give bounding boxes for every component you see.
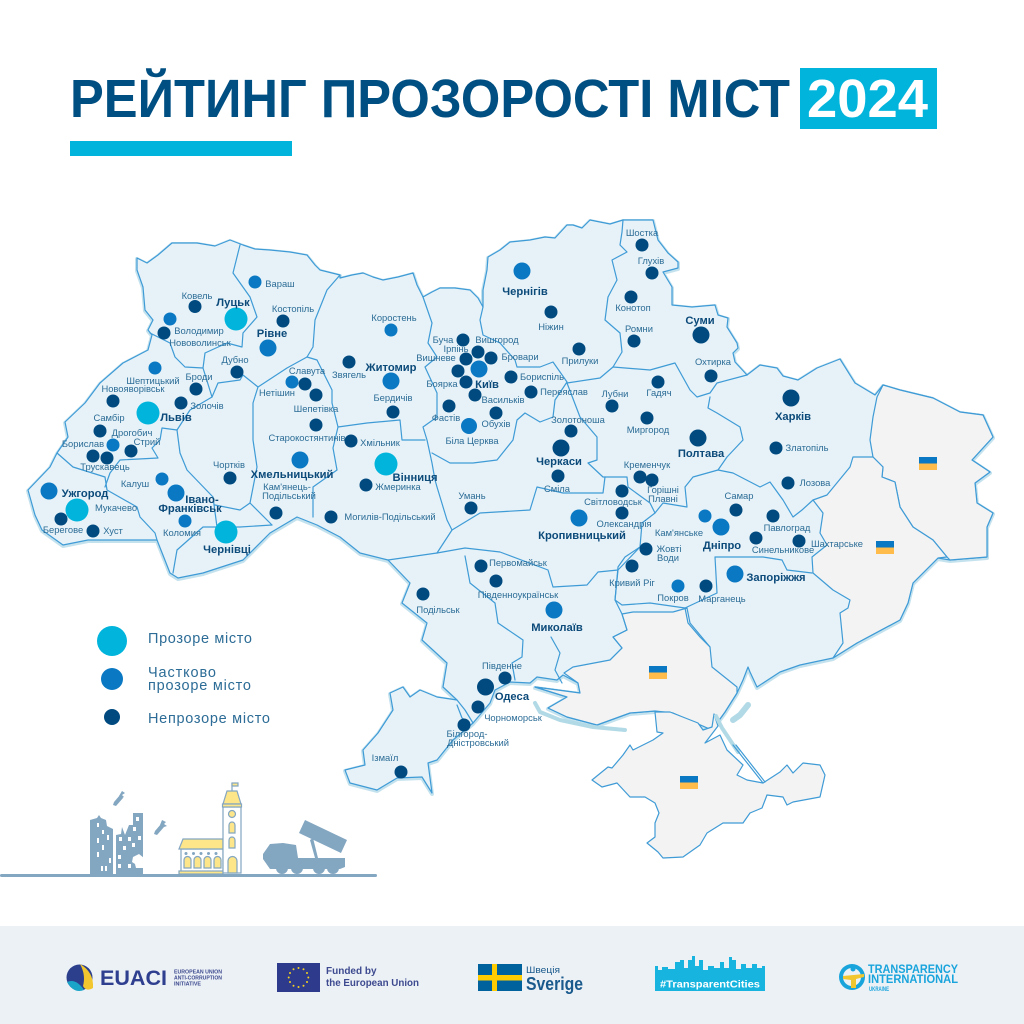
logo: Funded by the European Union: the European Union [326, 978, 419, 989]
city: Pivdenne [482, 660, 522, 684]
logo: EUACI: EUACI [100, 967, 167, 990]
mainland fill [28, 220, 993, 793]
legend: transparent city: Прозоре місто [148, 631, 252, 647]
city: Marhanets: Марганець [698, 593, 746, 604]
logo: Sweden: Швеція [526, 965, 560, 975]
legend [97, 626, 270, 727]
city: Bila Tserkva: Біла Церква [445, 435, 499, 446]
city: Samar [725, 490, 753, 516]
city: Shostka [626, 227, 659, 252]
city: Podilsk [416, 588, 461, 615]
city: Synelnykove: Синельникове [752, 544, 814, 555]
city: Kamianets-Podilskyi: Подільський [262, 490, 316, 501]
city: Zhovti Vody [640, 542, 681, 563]
city: Novovolynsk [158, 326, 232, 348]
city: Kropyvnytskyi [538, 510, 626, 542]
city: Pryluky: Прилуки [562, 355, 598, 366]
city: Lutsk [216, 297, 250, 330]
occupied region: Donetsk [812, 457, 947, 658]
city: Nizhyn [538, 306, 564, 332]
ruined buildings [90, 813, 144, 874]
city: Mykolaiv: Миколаїв [531, 622, 583, 634]
city: Sumy: Суми [685, 315, 715, 327]
city: Bilhorod-Dnistrovskyi [447, 718, 509, 748]
town hall [179, 783, 242, 874]
city: Lutsk: Луцьк [216, 297, 250, 309]
city: Vasylkiv [468, 388, 524, 405]
city: Irpin [443, 343, 472, 366]
city: Berdychiv: Бердичів [373, 392, 413, 403]
city: Zlatopil: Златопіль [785, 442, 829, 453]
logo: TransparentCities: #TransparentCities [660, 980, 760, 990]
city: Shepetivka: Шепетівка [294, 403, 339, 414]
city: Okhtyrka [695, 356, 732, 382]
city: Novoiavorivsk [101, 383, 165, 408]
city: Oleksandriia: Олександрія [596, 518, 652, 529]
city: Pereiaslav [524, 386, 588, 398]
city: Novoiavorivsk: Новояворівськ [101, 383, 165, 394]
city: Svitlovodsk [584, 484, 643, 507]
city: Shakhtarske: Шахтарське [811, 538, 863, 549]
city: Irpin: Ірпінь [443, 343, 469, 354]
city: Chernivtsi [203, 520, 251, 556]
legend: partially transparent city [101, 665, 251, 694]
city: Bucha: Буча [433, 334, 454, 345]
city: Stryi [124, 436, 160, 458]
logo: EUACI: INITIATIVE [174, 982, 202, 988]
city: Lviv: Львів [160, 412, 192, 424]
occupied region: Kherson [535, 608, 737, 730]
logo: Transparency International Ukraine: INTERNATIONAL [868, 974, 958, 986]
legend: partially transparent city: Частково [148, 665, 216, 681]
logo: Transparency International Ukraine: UKRAINE [869, 987, 889, 993]
city: Boiarka [426, 376, 472, 389]
city: Sheptytskyi: Шептицький [126, 375, 180, 386]
city: Obukhiv [482, 406, 510, 429]
city: Dnipro: Дніпро [703, 540, 741, 552]
city: Kalush: Калуш [121, 478, 149, 489]
logo: Funded by the European Union: Funded by [326, 966, 377, 977]
logo: Transparency International Ukraine [839, 964, 958, 993]
city: Berdychiv [373, 392, 413, 418]
illustration: war and city [0, 783, 377, 877]
title: РЕЙТИНГ ПРОЗОРОСТІ МІСТ [70, 68, 790, 129]
bomb 1 [113, 791, 125, 806]
legend: non-transparent city: Непрозоре місто [148, 711, 270, 727]
city: Zaporizhzhia: Запоріжжя [746, 572, 806, 584]
city: Pavlohrad: Павлоград [764, 522, 811, 533]
city: Bilhorod-Dnistrovskyi: Дністровський [447, 737, 509, 748]
city: Zhovti Vody: Води [657, 552, 679, 563]
city: Pokrov: Покров [657, 592, 689, 603]
city: Kovel: Ковель [182, 290, 213, 301]
city: Vinnytsia: Вінниця [392, 472, 438, 484]
city: Khmilnyk: Хмільник [360, 437, 401, 448]
city: Ivano-Frankivsk: Франківськ [158, 503, 222, 515]
city: Uman [458, 490, 486, 514]
city: Horishni Plavni [646, 474, 679, 504]
city: Vasylkiv: Васильків [482, 394, 524, 405]
occupied region: Crimea [592, 712, 825, 858]
city: Kyiv [470, 360, 499, 391]
city: Lubny [602, 388, 628, 412]
city: Kyiv: Київ [475, 379, 499, 391]
city: Kamianske [655, 510, 712, 538]
logo: EUACI: ANTI-CORRUPTION [174, 976, 222, 982]
city: Chernivtsi: Чернівці [203, 544, 251, 556]
city: Uzhhorod [40, 482, 108, 500]
city: Kryvyi Rih: Кривий Ріг [609, 577, 655, 588]
city: Boiarka: Боярка [426, 378, 458, 389]
city: Poltava: Полтава [678, 448, 725, 460]
city: Slavuta: Славута [289, 365, 326, 376]
bomb 2 [154, 820, 167, 835]
city: Zviahel [332, 356, 366, 380]
logo: Sweden: Sverige [526, 974, 583, 994]
city: Izmail: Ізмаїл [372, 752, 398, 763]
city: Khust: Хуст [103, 525, 124, 536]
city: Oleksandriia [596, 506, 652, 529]
city: Lubny: Лубни [602, 388, 628, 399]
city: Bila Tserkva [445, 418, 499, 446]
city: Boryspil [504, 370, 564, 384]
city: Romny [625, 323, 653, 348]
city: Smila [544, 470, 571, 494]
city: Brovary [484, 351, 539, 364]
map of Ukraine [28, 220, 993, 858]
city: Zhmerynka [360, 478, 422, 492]
city: Hlukhiv [638, 255, 664, 280]
city: Slavuta [289, 365, 326, 390]
city: Kremenchuk: Кременчук [624, 459, 671, 470]
logo: Funded by the European Union [277, 963, 419, 992]
legend: transparent city [97, 626, 252, 656]
city: Khust [86, 524, 124, 538]
city: Bilhorod-Dnistrovskyi: Білгород- [447, 728, 487, 739]
city: Lviv [136, 402, 192, 424]
city: Chornomorsk: Чорноморськ [484, 712, 543, 723]
city: Zhmerynka: Жмеринка [375, 481, 422, 492]
city: Zolochiv [174, 396, 224, 411]
city: Pivdennoukrainsk: Південноукраїнськ [478, 589, 559, 600]
city: Samar: Самар [725, 490, 753, 501]
transparent cities [66, 297, 438, 556]
city: Kropyvnytskyi: Кропивницький [538, 530, 626, 542]
spits and lagoons [535, 703, 748, 752]
city: Kostopil: Костопіль [272, 303, 314, 314]
city: Varash [248, 276, 295, 289]
city: Stryi: Стрий [134, 436, 160, 447]
city: Truskavets [80, 452, 130, 472]
city: Ivano-Frankivsk [158, 484, 222, 515]
city: Horishni Plavni: Горішні [647, 484, 679, 495]
city: Rivne: Рівне [257, 328, 287, 340]
city: Fastiv: Фастів [432, 412, 460, 423]
flag: Crimea [680, 776, 698, 789]
city: Khmilnyk [344, 434, 401, 448]
city: Kamianske: Кам'янське [655, 527, 703, 538]
year badge: 2024 [807, 69, 928, 129]
city: Pryluky [562, 342, 598, 366]
logo: EUACI [66, 964, 222, 991]
city: Truskavets: Трускавець [80, 461, 130, 472]
legend: partially transparent city: прозоре місто [148, 678, 251, 694]
city: Chornomorsk [472, 700, 543, 723]
title underline bar [70, 141, 292, 156]
city: Zaporizhzhia [726, 566, 806, 584]
city: Kolomyia [163, 514, 201, 538]
city: Obukhiv: Обухів [482, 418, 510, 429]
city: Lozova [782, 476, 831, 490]
rocket launcher truck [263, 820, 347, 874]
city: Uman: Умань [458, 490, 486, 501]
city: Korosten [371, 312, 417, 336]
logo: Sweden [478, 964, 583, 994]
city: Zolotonosha: Золотоноша [551, 414, 606, 425]
city: Shepetivka [294, 388, 339, 414]
city: Chortkiv [213, 459, 245, 484]
city: Ivano-Frankivsk: Івано- [185, 494, 219, 506]
Arabat spit line [733, 745, 765, 783]
city: Vyshneve [416, 352, 464, 378]
legend: non-transparent city [104, 709, 270, 727]
city: Cherkasy [536, 440, 582, 468]
city: Pokrov [657, 580, 689, 603]
city: Volodymyr [164, 312, 224, 336]
city: Zlatopil [770, 442, 829, 454]
city: Drohobych [106, 427, 152, 452]
city: Brovary: Бровари [501, 351, 539, 362]
logo: Transparency International Ukraine: TRANSPARENCY [868, 964, 958, 976]
flag: Kherson [649, 666, 667, 679]
city: Dnipro [703, 518, 741, 552]
city: Konotop [615, 290, 651, 313]
city: Kolomyia: Коломия [163, 527, 201, 538]
city: Sambir: Самбір [93, 412, 125, 423]
city: Kamianets-Podilskyi [262, 481, 316, 520]
city: Vyshhorod [472, 334, 519, 358]
city: Pivdenne: Південне [482, 660, 522, 671]
city: Berehove [43, 512, 83, 535]
city: Varash: Вараш [265, 278, 295, 289]
city: Starokostiantyniv [268, 418, 346, 443]
city: Lozova: Лозова [800, 477, 831, 488]
city: Netishyn: Нетішин [259, 387, 295, 398]
city: Smila: Сміла [544, 483, 571, 494]
city: Fastiv [432, 400, 460, 423]
city: Bucha [433, 334, 470, 346]
city: Chernihiv [502, 262, 548, 298]
city: Cherkasy: Черкаси [536, 456, 582, 468]
city: Korosten: Коростень [371, 312, 417, 323]
city: Zhytomyr [364, 362, 417, 390]
city: Mohyliv-Podilskyi [324, 510, 436, 524]
city: Hadiach [646, 376, 672, 398]
city: Kamianets-Podilskyi: Кам'янець- [263, 481, 311, 492]
city: Pervomaisk [474, 557, 548, 572]
city: Zhytomyr: Житомир [364, 362, 417, 374]
occupied region: Luhansk [870, 385, 993, 560]
city: Horishni Plavni: Плавні [648, 493, 678, 504]
city: Kovel [182, 290, 213, 313]
city: Boryslav: Борислав [62, 438, 104, 449]
city: Rivne [257, 328, 287, 356]
city: Hlukhiv: Глухів [638, 255, 664, 266]
city: Berehove: Берегове [43, 524, 83, 535]
city: Hadiach: Гадяч [646, 387, 672, 398]
city: Boryslav [62, 438, 104, 462]
city: Romny: Ромни [625, 323, 653, 334]
city: Pivdennoukrainsk [478, 574, 559, 600]
city: Izmail [372, 752, 408, 778]
city: Odesa: Одеса [495, 691, 530, 703]
city: Brody: Броди [185, 371, 213, 382]
partially transparent cities [40, 262, 806, 634]
city: Vinnytsia [374, 452, 438, 484]
city: Svitlovodsk: Світловодськ [584, 496, 643, 507]
city: Chortkiv: Чортків [213, 459, 245, 470]
city: Shakhtarske [792, 534, 863, 549]
flag: Luhansk [919, 457, 937, 470]
city: Drohobych: Дрогобич [112, 427, 152, 438]
city: Zolochiv: Золочів [190, 400, 224, 411]
city: Starokostiantyniv: Старокостянтинів [268, 432, 346, 443]
city: Netishyn [259, 376, 298, 398]
city: Pereiaslav: Переяслав [540, 386, 588, 397]
city: Synelnykove [750, 532, 814, 555]
ground line [0, 874, 377, 877]
city: Kremenchuk [624, 459, 671, 484]
non-transparent cities [43, 227, 863, 778]
city: Dubno: Дубно [221, 354, 249, 365]
city: Novovolynsk: Нововолинськ [169, 337, 232, 348]
city: Myrhorod [627, 412, 670, 435]
city: Odesa [477, 678, 530, 703]
city: Brody [185, 371, 213, 396]
city: Vyshhorod: Вишгород [475, 334, 519, 345]
city: Boryspil: Бориспіль [520, 371, 564, 382]
city: Marhanets [698, 580, 746, 604]
city: Kryvyi Rih [609, 560, 655, 588]
city: Zviahel: Звягель [332, 369, 366, 380]
city: Mukachevo: Мукачево [95, 502, 137, 513]
city: Sumy [685, 315, 715, 344]
city: Nizhyn: Ніжин [538, 321, 564, 332]
city: Pervomaisk: Первомайськ [489, 557, 548, 568]
city: Kalush [121, 472, 168, 489]
city: Uzhhorod: Ужгород [62, 488, 108, 500]
city: Podilsk: Подільськ [416, 604, 461, 615]
city: Dubno [221, 354, 249, 378]
flag: Donetsk [876, 541, 894, 554]
city: Volodymyr: Володимир [174, 325, 224, 336]
city: Poltava [678, 430, 725, 460]
city: Mohyliv-Podilskyi: Могилів-Подільський [344, 511, 436, 522]
city: Chernihiv: Чернігів [502, 286, 548, 298]
city: Sheptytskyi [126, 362, 180, 386]
city: Konotop: Конотоп [615, 302, 651, 313]
city: Mykolaiv [531, 602, 583, 634]
mainland halo [28, 221, 993, 794]
city: Zhovti Vody: Жовті [657, 543, 681, 554]
city: Khmelnytskyi [251, 452, 333, 481]
city: Kharkiv [775, 390, 811, 423]
footer band [0, 926, 1024, 1024]
logo: TransparentCities [655, 956, 765, 991]
city: Khmelnytskyi: Хмельницький [251, 469, 333, 481]
city: Mukachevo [66, 498, 137, 522]
city: Pavlohrad [764, 510, 811, 533]
logo: EUACI: EUROPEAN UNION [174, 970, 222, 976]
city: Kharkiv: Харків [775, 411, 811, 423]
city: Okhtyrka: Охтирка [695, 356, 732, 367]
city: Zolotonosha [551, 414, 606, 438]
Dnipro river and regional borders [57, 220, 813, 723]
city: Kostopil [272, 303, 314, 328]
city: Shostka: Шостка [626, 227, 659, 238]
city: Myrhorod: Миргород [627, 424, 670, 435]
city: Vyshneve: Вишневе [416, 352, 456, 363]
city: Sambir [93, 412, 125, 438]
